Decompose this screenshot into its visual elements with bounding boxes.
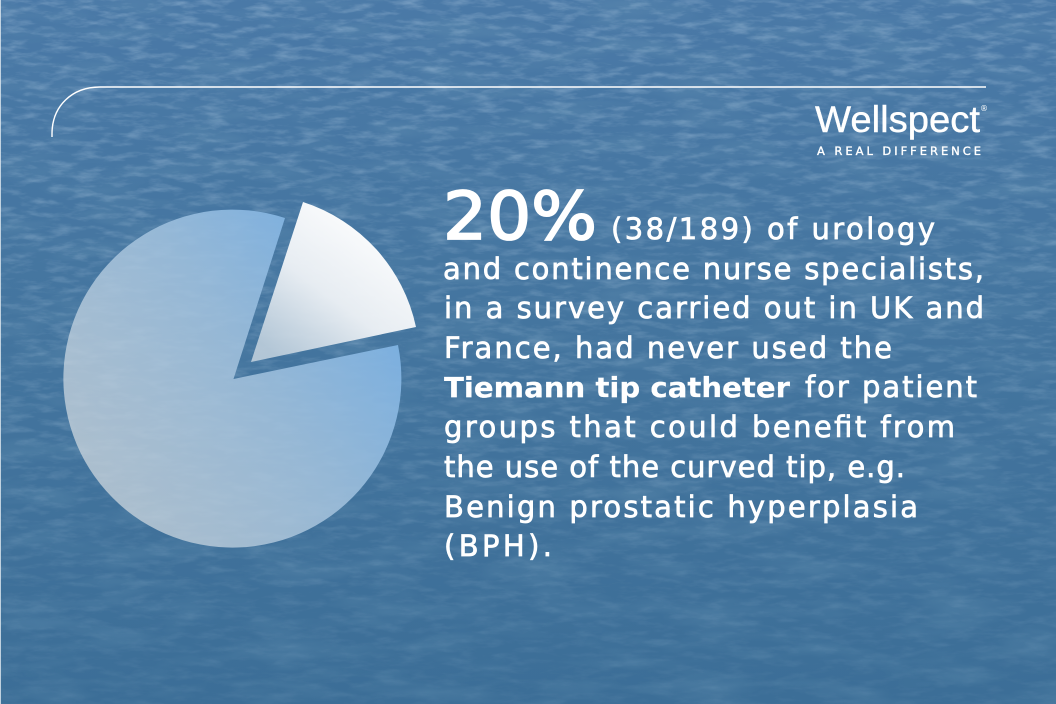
rounded header line (52, 87, 986, 137)
logo wordmark: Wellspect (815, 99, 981, 140)
text line 8: Benign prostatic hyperplasia (444, 490, 918, 524)
text line 6: groups that could benefit from (444, 410, 955, 444)
text line 5 bold: Tiemann tip catheter (444, 371, 790, 404)
text line 4: France, had never used the (444, 331, 892, 365)
headline figure: 20% (443, 178, 597, 255)
text line 7: the use of the curved tip, e.g. (444, 450, 905, 484)
text line 2: and continence nurse specialists, (443, 252, 984, 286)
text line 5 regular: for patient (805, 370, 977, 404)
pie segment: 20 percent (251, 202, 416, 362)
registered mark: ® (980, 104, 988, 113)
statistic text (443, 178, 984, 563)
text line 1: (38/189) of urology (611, 212, 935, 246)
text line 3: in a survey carried out in UK and (444, 291, 984, 325)
pie segment: 80 percent (63, 210, 401, 548)
logo: Wellspect (815, 99, 988, 158)
pie chart (63, 202, 416, 548)
logo tagline: A REAL DIFFERENCE (817, 144, 981, 158)
text line 9: (BPH). (444, 529, 552, 563)
